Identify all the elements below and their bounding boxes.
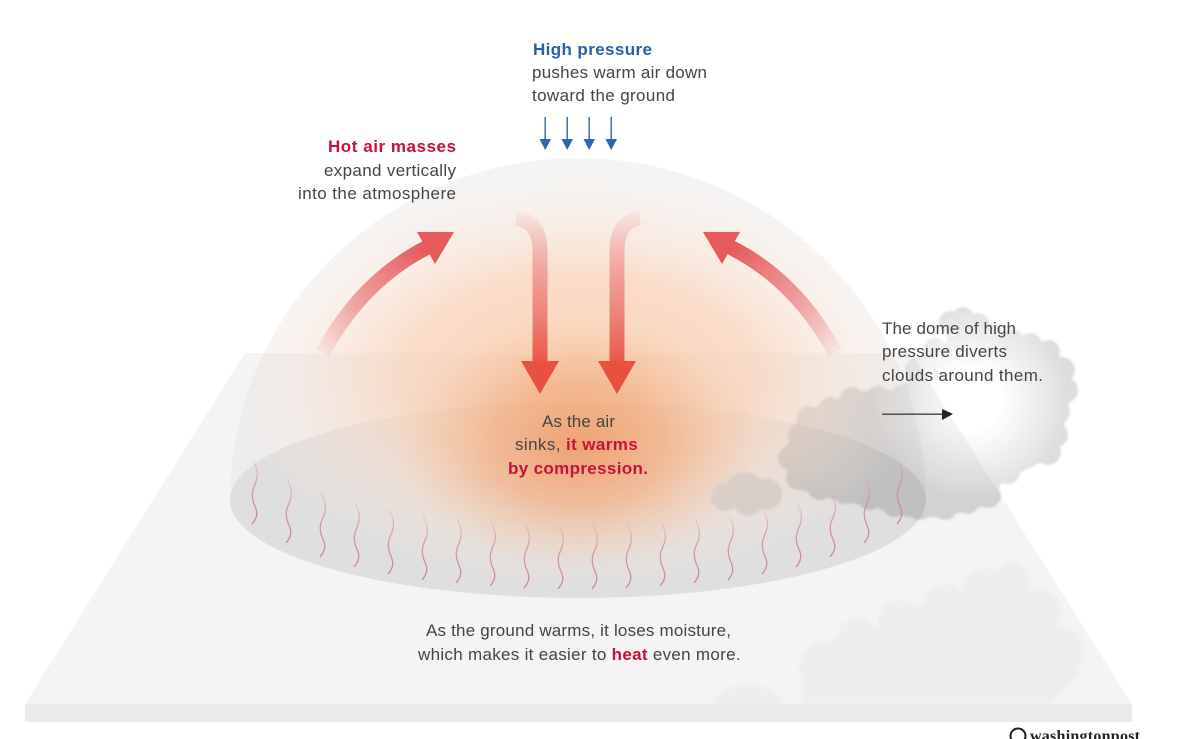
text: ground loses moisture: As the ground warms, it loses moisture, [426, 621, 731, 640]
text: warms by compression: As the air [542, 412, 615, 431]
main cloud [778, 307, 1078, 520]
text: warms by compression: by compression. [508, 459, 648, 478]
arrow: rising air left [323, 232, 454, 352]
arrow: sinking air left [516, 218, 559, 394]
text: dome diverts clouds [882, 319, 1043, 385]
text: hot air masses: Hot air masses [328, 137, 456, 156]
text: high pressure: pushes warm air down [532, 63, 707, 82]
text: hot air masses: expand vertically [324, 161, 456, 180]
arrow: cloud direction [882, 409, 953, 420]
ground plane [25, 353, 1132, 722]
high pressure arrows [540, 117, 617, 150]
text: ground loses moisture: which makes it easier to heat even more. [417, 645, 741, 664]
cloud shadow on ground [713, 562, 1084, 723]
small cloud [711, 472, 782, 516]
text: warms by compression [508, 412, 648, 478]
text: dome diverts clouds: The dome of high [882, 319, 1016, 338]
text: high pressure: toward the ground [532, 86, 675, 105]
arrow: rising air right [703, 232, 835, 352]
arrow: sinking air right [598, 218, 640, 394]
text: high pressure [532, 40, 707, 105]
text: hot air masses: into the atmosphere [298, 184, 456, 203]
dome [225, 150, 935, 605]
ground-warming squiggles [252, 459, 902, 589]
text: dome diverts clouds: clouds around them. [882, 366, 1043, 385]
text: ground loses moisture [417, 621, 741, 664]
text: high pressure: High pressure [533, 40, 652, 59]
text: warms by compression: sinks, it warms [515, 435, 638, 454]
text: hot air masses [298, 137, 456, 203]
text: dome diverts clouds: pressure diverts [882, 342, 1007, 361]
